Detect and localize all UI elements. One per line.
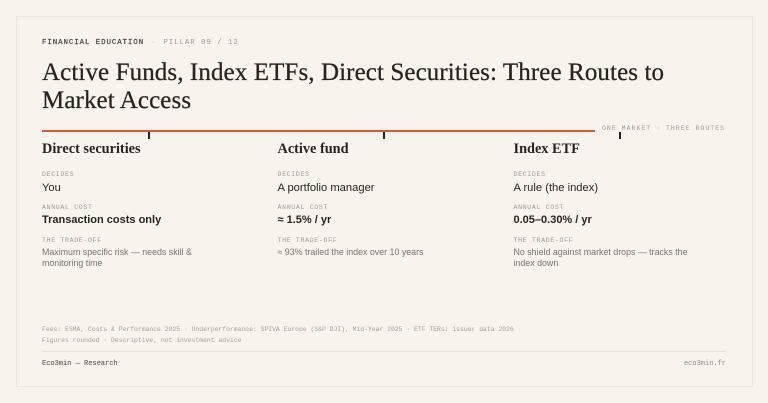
sources note: Fees: ESMA, Costs & Performance 2025 · Underperformance: SPIVA Europe (S&P DJI), Mid-Year 2025 · ETF TERs: issuer data 2026 — [42, 326, 514, 333]
trade-off text: monitoring time — [42, 258, 102, 268]
sources note: Figures rounded · Descriptive, not investment advice — [42, 337, 241, 344]
title — [42, 59, 664, 114]
decides label: DECIDES — [278, 171, 310, 178]
footer brand: Eco3min — Research — [42, 360, 118, 368]
title: Market Access — [42, 86, 191, 114]
column heading: Active fund — [278, 141, 349, 157]
tick: direct securities — [148, 132, 150, 139]
tick: index ETF — [619, 132, 620, 139]
eyebrow: FINANCIAL EDUCATION · PILLAR 09 / 12 — [42, 39, 239, 47]
annual cost value: 0.05–0.30% / yr — [514, 214, 592, 226]
decides value: A portfolio manager — [278, 182, 375, 194]
decides value: A rule (the index) — [514, 182, 598, 194]
column heading: Index ETF — [514, 141, 580, 157]
decides value: You — [42, 182, 61, 194]
trade-off text: No shield against market drops — tracks the — [514, 247, 688, 257]
decides label: DECIDES — [514, 171, 546, 178]
trade-off text: index down — [514, 258, 558, 268]
column heading: Direct securities — [42, 141, 141, 157]
timeline caption: ONE MARKET · THREE ROUTES — [602, 124, 725, 132]
trade-off label: THE TRADE-OFF — [42, 237, 102, 244]
panel: active fund — [278, 141, 424, 257]
timeline rule — [42, 130, 595, 132]
tick: active fund — [383, 132, 384, 139]
annual cost label: ANNUAL COST — [514, 204, 564, 211]
footer url: eco3min.fr — [684, 360, 726, 368]
annual cost label: ANNUAL COST — [278, 204, 328, 211]
decides label: DECIDES — [42, 171, 74, 178]
title: Active Funds, Index ETFs, Direct Securities: Three Routes to — [42, 59, 664, 86]
annual cost value: ≈ 1.5% / yr — [278, 214, 331, 226]
panel: direct securities — [42, 141, 192, 268]
trade-off text: Maximum specific risk — needs skill & — [42, 247, 192, 257]
sources note — [42, 326, 514, 344]
trade-off text: ≈ 93% trailed the index over 10 years — [278, 247, 423, 257]
annual cost value: Transaction costs only — [42, 214, 161, 226]
trade-off label: THE TRADE-OFF — [514, 237, 573, 244]
trade-off label: THE TRADE-OFF — [278, 237, 337, 244]
trade-off text — [42, 247, 192, 268]
panel: index ETF — [514, 141, 688, 268]
trade-off text — [514, 247, 688, 268]
annual cost label: ANNUAL COST — [42, 204, 93, 211]
